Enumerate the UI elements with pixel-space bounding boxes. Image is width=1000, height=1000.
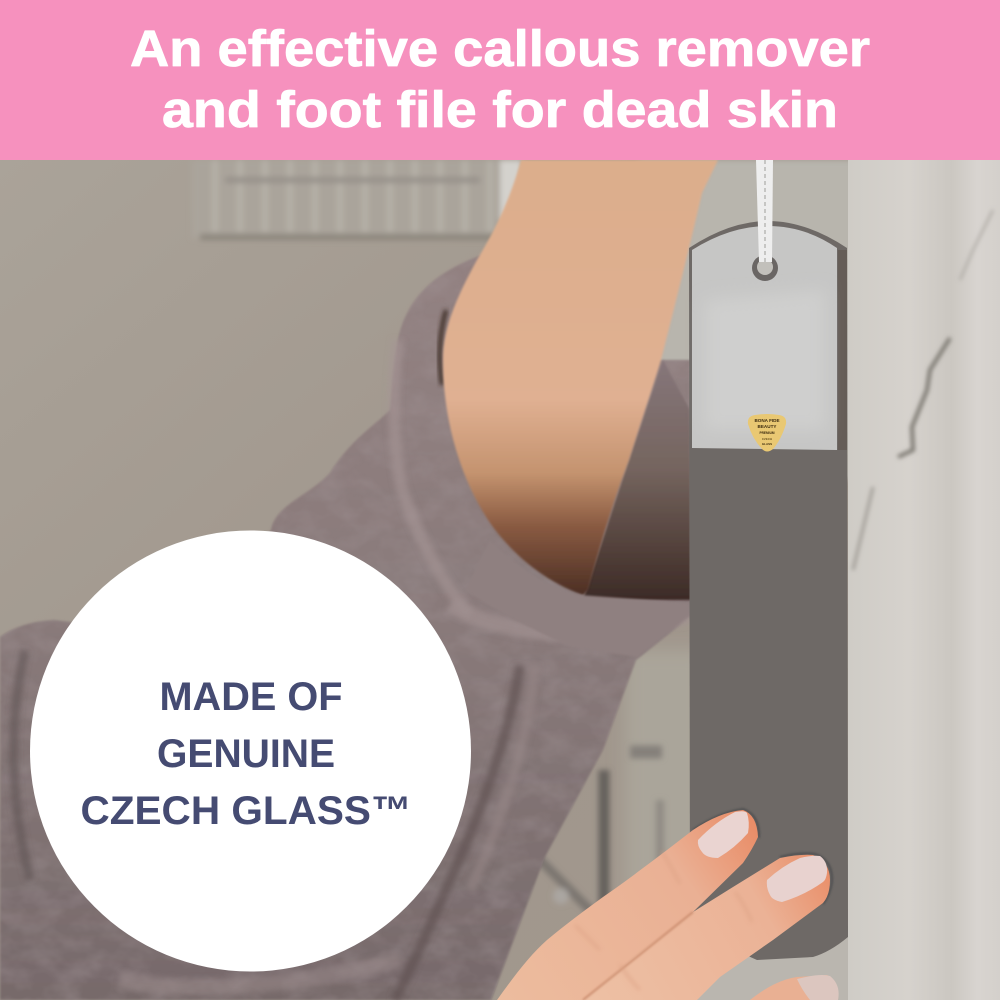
- badge: PREMIUM: [759, 431, 775, 435]
- title text: An effective callous remover: [130, 20, 870, 77]
- hand: [497, 809, 839, 1000]
- file hole: [752, 255, 778, 281]
- robe fur texture: [0, 482, 600, 1000]
- background: lower area behind hand: [625, 650, 705, 1000]
- file body: [689, 221, 848, 960]
- third nail: [797, 975, 839, 1000]
- middle nail: [767, 856, 827, 902]
- badge: CZECH: [762, 437, 772, 441]
- callout circle: [30, 530, 471, 972]
- string strands: [764, 160, 766, 262]
- middle finger: [583, 855, 830, 1000]
- badge: BEAUTY: [758, 424, 776, 429]
- callout text: GENUINE: [157, 732, 335, 776]
- title text: and foot file for dead skin: [162, 81, 838, 138]
- file highlight: [705, 290, 825, 430]
- arm: [443, 160, 718, 595]
- cuff front edge: [465, 540, 690, 657]
- background: light strip behind file: [640, 160, 870, 480]
- robe folds: [14, 340, 690, 1000]
- string: [756, 160, 773, 262]
- callout text: CZECH GLASS™: [80, 789, 411, 833]
- file clear top section: [692, 226, 837, 450]
- file right edge: [838, 250, 847, 450]
- finger separation: [583, 912, 693, 1000]
- title banner: [0, 0, 1000, 160]
- index nail: [698, 811, 749, 858]
- shadow inside cuff: [583, 360, 691, 600]
- background: blurred wall frame: [192, 160, 522, 238]
- title text: [130, 20, 870, 138]
- callout text: [80, 675, 411, 833]
- badge: GLASS: [762, 442, 772, 446]
- background: area below file: [690, 930, 860, 1000]
- background: blurred fixture: [530, 752, 662, 1000]
- knuckles: [575, 852, 752, 990]
- third finger: [750, 975, 839, 1000]
- badge: BONA FIDE: [754, 418, 780, 423]
- product: glass foot file: [689, 160, 848, 960]
- robe sleeve: [0, 250, 700, 1000]
- finger shadow halo: [693, 809, 832, 904]
- cuff crease: [440, 310, 446, 385]
- callout text: MADE OF: [160, 675, 342, 719]
- badge: [748, 414, 786, 452]
- index finger: [497, 810, 758, 1000]
- background: marble wall: [848, 160, 1000, 1000]
